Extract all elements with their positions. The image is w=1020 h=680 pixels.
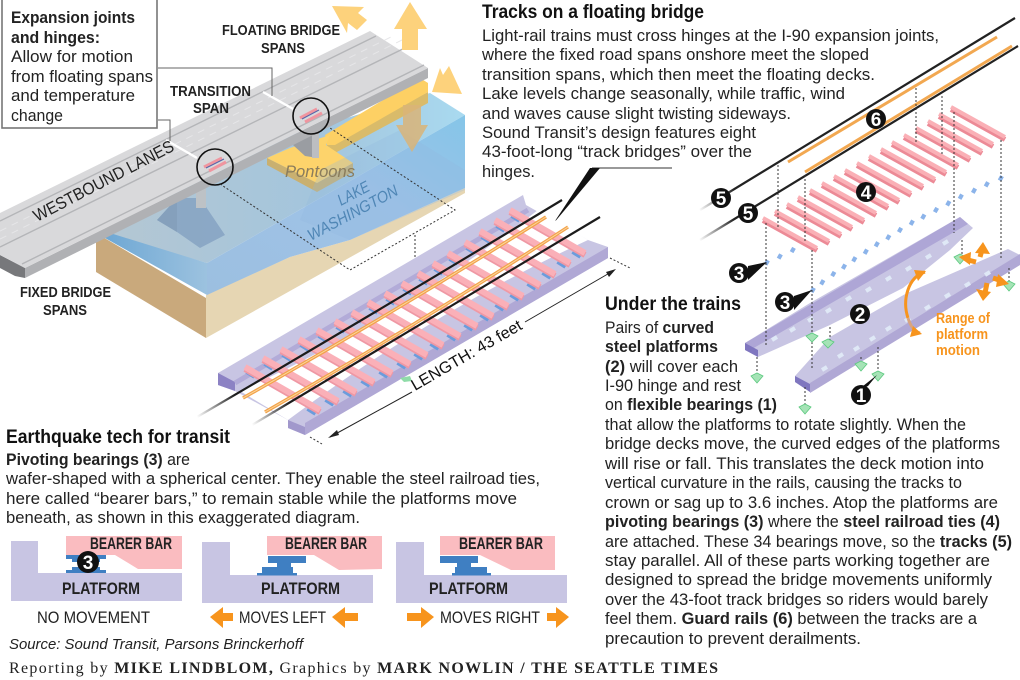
text block: under the trains: will rise or fall. This translates the deck motion into xyxy=(604,455,984,473)
source line: Source: Sound Transit, Parsons Brinckerhoff xyxy=(9,637,305,653)
illustration: assembled 43-foot track bridge xyxy=(197,195,630,444)
diagram: no movement: NO MOVEMENT xyxy=(37,608,150,627)
text block: under the trains: over the 43-foot track bridges so riders would barely xyxy=(605,591,989,609)
diagram: moves right: PLATFORM xyxy=(429,579,508,598)
number markers: 4 xyxy=(861,183,872,204)
exploded bearer bars xyxy=(763,107,1005,250)
illustration: Lake Washington bridge overview xyxy=(0,2,465,338)
text block: under the trains: bridge decks move, the curved edges of the platforms xyxy=(605,435,1000,453)
label: range of platform motion: platform xyxy=(936,327,988,343)
text block: tracks on a floating bridge xyxy=(481,27,939,181)
number markers: 5 xyxy=(743,204,754,225)
text block: tracks on a floating bridge: hinges. xyxy=(482,163,535,181)
text block: earthquake tech xyxy=(5,451,540,527)
text block: under the trains: Pairs of curved xyxy=(605,319,714,337)
exploded pivoting bearings xyxy=(765,177,1003,291)
lake water xyxy=(96,93,465,295)
pointer to track bridge xyxy=(553,168,672,224)
orange motion arrows xyxy=(906,242,1009,337)
diagram: no movement: 3 xyxy=(83,553,93,574)
number markers: 2 xyxy=(855,305,865,326)
dotted callout to track bridge xyxy=(220,128,455,270)
text block: under the trains: I-90 hinge and rest xyxy=(605,377,741,395)
text block: under the trains: are attached. These 34 bearings move, so the tracks (5) xyxy=(605,533,1012,551)
text block: under the trains: that allow the platforms to rotate slightly. When the xyxy=(605,416,966,434)
lower curved platform xyxy=(795,249,1020,393)
length dimension xyxy=(310,258,630,444)
green bearing hint xyxy=(400,376,412,382)
flexible bearings xyxy=(751,254,1015,414)
text block: earthquake tech: here called “bearer bars,” to remain stable while the platforms move xyxy=(6,490,517,508)
text block: tracks on a floating bridge: and waves cause slight twisting sideways. xyxy=(482,105,791,123)
text block: tracks on a floating bridge: transition spans, which then meet the floating decks. xyxy=(482,66,875,84)
number markers: 5 xyxy=(716,189,727,210)
length dimension: LENGTH: 43 feet xyxy=(408,317,526,394)
platforms xyxy=(218,195,608,435)
label: lake: LAKE xyxy=(335,178,373,210)
label: transition: TRANSITION xyxy=(170,83,251,100)
label: span: SPAN xyxy=(193,100,229,117)
bearer bar ties xyxy=(245,210,585,412)
detail circles at hinges xyxy=(197,98,329,185)
number markers: 1 xyxy=(856,386,867,407)
number markers: 6 xyxy=(871,110,881,131)
label: fixed spans: SPANS xyxy=(43,302,87,319)
label: washington: WASHINGTON xyxy=(305,182,402,245)
diagram: moves right: BEARER BAR xyxy=(459,534,543,553)
text block: under the trains xyxy=(604,319,1012,648)
text block: under the trains: crown or sag up to 3.6 inches. Atop the platforms are xyxy=(605,494,998,512)
text block: tracks on a floating bridge: where the fixed road spans onshore meet the sloped xyxy=(481,46,869,64)
diagram: no movement xyxy=(11,534,182,627)
callout box: expansion joints and hinges: and hinges: xyxy=(11,29,100,47)
lake block sand xyxy=(96,188,465,338)
exploded rails xyxy=(700,18,1018,240)
text block: under the trains: (2) will cover each xyxy=(605,358,738,376)
heading: earthquake tech for transit: Earthquake tech for transit xyxy=(6,427,231,448)
number markers xyxy=(711,109,886,407)
diagram: moves left: MOVES LEFT xyxy=(239,608,326,627)
text block: under the trains: pivoting bearings (3) where the steel railroad ties (4) xyxy=(605,513,1000,531)
heading: under the trains: Under the trains xyxy=(605,294,741,315)
text block: under the trains: feel them. Guard rails (6) between the tracks are a xyxy=(605,610,978,628)
running rails and guard rails xyxy=(197,200,600,425)
callout box: expansion joints and hinges: change xyxy=(11,107,63,125)
number markers: 3 xyxy=(780,293,790,314)
pontoons xyxy=(267,78,428,192)
callout box: expansion joints and hinges: and temperature xyxy=(11,87,135,105)
text block: under the trains: vertical curvature in the rails, causing the tracks to xyxy=(605,474,962,492)
transition span pier xyxy=(293,130,319,158)
diagram: no movement: BEARER BAR xyxy=(90,534,172,553)
fixed bridge pier xyxy=(157,182,225,248)
text block: earthquake tech: Pivoting bearings (3) are xyxy=(6,451,190,469)
heading: tracks on a floating bridge: Tracks on a floating bridge xyxy=(482,2,704,23)
callout box: expansion joints and hinges: from floating spans xyxy=(11,68,153,86)
label: westbound lanes: WESTBOUND LANES xyxy=(30,137,177,226)
label: spans: SPANS xyxy=(261,40,305,57)
text block: tracks on a floating bridge: Sound Transit’s design features eight xyxy=(482,124,756,142)
number markers: 3 xyxy=(734,264,744,285)
motion arrows xyxy=(332,2,462,152)
text block: earthquake tech: beneath, as shown in this exaggerated diagram. xyxy=(6,509,360,527)
label: range of platform motion: motion xyxy=(936,343,980,359)
diagram: moves left xyxy=(202,534,382,628)
deck: westbound lanes xyxy=(0,31,428,278)
credit line: Reporting by MIKE LINDBLOM, Graphics by MARK NOWLIN / THE SEATTLE TIMES xyxy=(9,660,718,677)
diagram: moves left: BEARER BAR xyxy=(285,534,367,553)
text block: tracks on a floating bridge: 43-foot-long “track bridges” over the xyxy=(482,143,752,161)
diagram: moves right: MOVES RIGHT xyxy=(440,608,540,627)
diagram: no movement: PLATFORM xyxy=(62,579,140,598)
text block: under the trains: stay parallel. All of these parts working together are xyxy=(605,552,990,570)
label: fixed bridge: FIXED BRIDGE xyxy=(20,284,111,301)
diagram: moves left: PLATFORM xyxy=(261,579,340,598)
label: floating bridge spans: FLOATING BRIDGE xyxy=(222,22,340,39)
label: range of platform motion xyxy=(936,311,990,359)
illustration: exploded view of track bridge xyxy=(700,18,1020,414)
text block: tracks on a floating bridge: Lake levels change seasonally, while traffic, wind xyxy=(482,85,845,103)
text block: earthquake tech: wafer-shaped with a spherical center. They enable the steel railroad ties, xyxy=(5,470,540,488)
callout box: expansion joints and hinges: Expansion joints xyxy=(11,9,135,27)
dotted connector lines xyxy=(757,88,1009,405)
label: range of platform motion: Range of xyxy=(936,311,990,327)
callout box: expansion joints and hinges: Allow for motion xyxy=(11,48,133,66)
text block: under the trains: on flexible bearings (1) xyxy=(605,396,777,414)
upper curved platform xyxy=(745,217,973,357)
text block: under the trains: steel platforms xyxy=(605,338,718,356)
text block: tracks on a floating bridge: Light-rail trains must cross hinges at the I-90 expansion joints, xyxy=(482,27,939,45)
lake water overlay xyxy=(300,130,465,240)
callout box: expansion joints and hinges xyxy=(2,0,272,141)
bearings under ties xyxy=(247,215,581,413)
diagram: moves right xyxy=(396,534,569,628)
text block: under the trains: designed to spread the bridge movements uniformly xyxy=(605,571,993,589)
label: pontoons: Pontoons xyxy=(285,162,355,181)
text block: under the trains: precaution to prevent derailments. xyxy=(605,630,861,648)
